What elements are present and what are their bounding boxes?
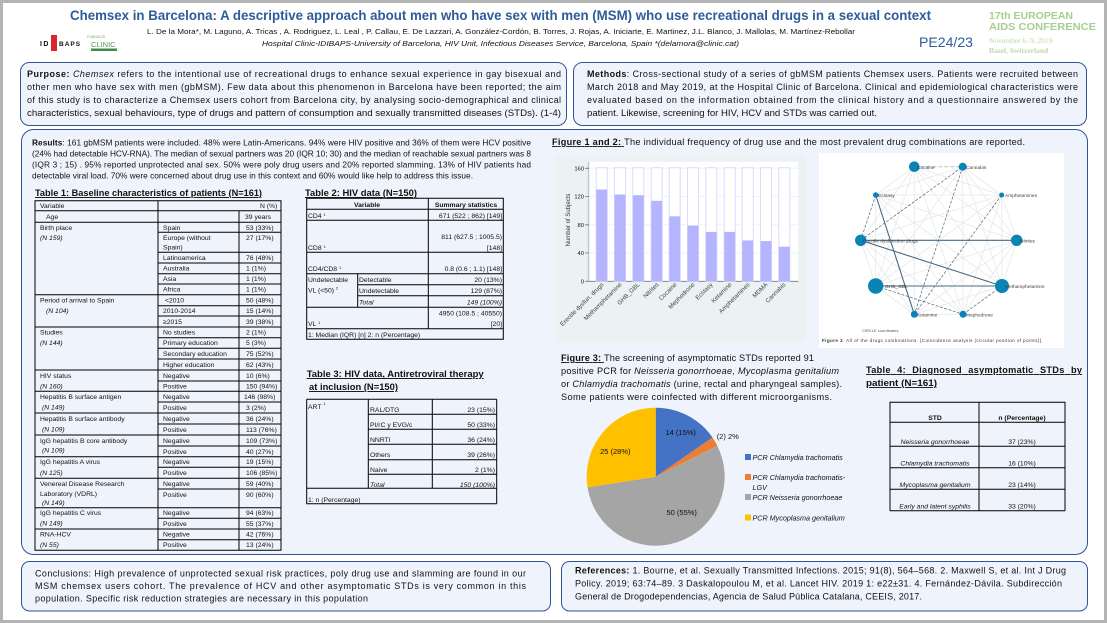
table 1: 15 (14%) — [246, 308, 274, 315]
table 1: 1 (1%) — [246, 286, 266, 294]
table 1: (N 159) — [40, 235, 63, 242]
table 1: Negative — [163, 394, 190, 401]
table 1: Negative — [163, 438, 190, 445]
bar chart: drug use frequency: 40 — [578, 251, 584, 257]
table 2: CD4/CD8 — [308, 266, 337, 273]
table 1: Latinoamerica — [163, 255, 206, 262]
pie chart: STD screening: 50 (55%) — [666, 508, 697, 517]
table 2: Total — [359, 300, 374, 306]
table 1: (N 55) — [40, 542, 59, 549]
bar chart: drug use frequency: 80 — [578, 223, 584, 229]
table 1: 55 (37%) — [246, 521, 274, 528]
table 2: 20 (13%) — [474, 277, 502, 284]
table 1: (N 109) — [42, 448, 65, 454]
network chart: drug combinations: Amphetamines — [1005, 193, 1038, 199]
panel: references: General de Drogodependencias, Agencia de Salud Pública Catalana, CEEIS, 2017. — [575, 592, 922, 602]
heading: table 3: at inclusion (N=150) — [309, 382, 398, 393]
heading: table 4: patient (N=161) — [866, 378, 937, 388]
table 1: Variable — [40, 203, 65, 210]
table 1: (N 149) — [42, 500, 65, 507]
table 1: <2010 — [165, 298, 184, 304]
table 2: VL — [308, 321, 316, 328]
panel: results — [22, 130, 1088, 554]
pie legend: LGV — [752, 483, 768, 492]
heading: figure 3: or Chlamydia trachomatis (urine, rectal and pharyngeal samples). — [561, 379, 842, 389]
table 2: 149 (100%) — [467, 300, 502, 306]
network chart: drug combinations: Ecstasy — [878, 193, 895, 199]
logo: Hospital Clinic: CLINIC — [91, 40, 116, 49]
panel: conclusions: MSM chemsex users cohort. The prevalence of HCV and other asymptomatic STDs is very common in this — [35, 581, 526, 591]
table 2: 0.8 (0.6 ; 1.1) [148] — [445, 266, 502, 273]
network chart: drug combinations: GHB_GBL — [885, 284, 908, 290]
table 1: Secondary education — [163, 351, 227, 358]
results text — [32, 138, 531, 180]
table 1: 53 (33%) — [246, 225, 274, 232]
table 1: 62 (43%) — [246, 362, 274, 369]
table 1: Primary education — [163, 340, 218, 347]
table 4: 33 (20%) — [1008, 504, 1036, 510]
authors: L. De la Mora*, M. Laguno, A. Tricas , A. Rodriguez, L. Leal , P. Callau, E. De Lazzari, A. González-Cordón, B. Torres, J. Rojas, A. Iniciarte, E. Martinez, J.L. Blanco, J. Mallolas, M. Martínez-Rebollar — [147, 27, 856, 36]
bar chart: drug use frequency: Ketamine — [710, 281, 734, 305]
table 1: Europe (without — [163, 235, 211, 242]
affiliation: Hospital Clinic-IDIBAPS-University of Barcelona, HIV Unit, Infectious Diseases Service, Barcelona, Spain *(delamora@clinic.cat) — [262, 39, 740, 48]
table 2: Undetectable — [359, 288, 399, 295]
panel: methods: evaluated based on the information obtained from the clinical history and a questionnaire answered by the — [587, 95, 1078, 105]
pie chart: STD screening — [587, 408, 739, 546]
panel: methods: patient. Likewise, screening for HIV, HCV and STDs was carried out. — [587, 108, 877, 118]
table 1: Negative — [163, 459, 190, 466]
table 1: RNA-HCV — [40, 532, 71, 538]
table 1: Birth place — [40, 225, 72, 232]
table 1: 150 (94%) — [246, 384, 277, 390]
table 3: 23 (15%) — [467, 407, 495, 414]
table 1: (N 125) — [40, 470, 63, 477]
panel: references: Policy. 2019; 63:74–89. 3 Daskalopoulou M, et al. Lancet HIV. 2019 1: e22±31. 4. Fernández-Dávila. Subdirección — [575, 578, 1062, 588]
heading: figure 3: Figure 3: The screening of asymptomatic STDs reported 91 — [561, 353, 814, 363]
table 1: 42 (76%) — [246, 532, 274, 538]
table 1: Positive — [163, 542, 187, 549]
table 1: 113 (76%) — [246, 427, 277, 434]
heading: figure 3: Some patients were coinfected with different microorganisms. — [561, 392, 832, 402]
network chart: drug combinations: Erectile dysfunction drugs — [863, 238, 919, 244]
table 1: 146 (98%) — [244, 394, 275, 401]
panel: methods — [574, 62, 1086, 126]
panel: purpose: other men who have sex with men (gbMSM). Few data about this phenomenon in Barcelona have been reported; the aim — [27, 82, 561, 92]
panel: conclusions: population. Specific risk reduction strategies are necessary in this population — [35, 594, 368, 604]
table 2: Undetectable — [308, 277, 348, 284]
table 1: 2 (1%) — [246, 330, 266, 336]
heading: table 4 — [866, 365, 1083, 388]
heading: table 3 — [307, 369, 484, 393]
table 2: Detectable — [359, 277, 392, 284]
table 1: ≥2015 — [163, 319, 182, 326]
panel: conclusions: Conclusions: High prevalence of unprotected sexual risk practices, poly drug use and slamming are found in our — [35, 568, 526, 578]
table 1: 40 (27%) — [246, 449, 274, 456]
table 3: Naive — [370, 467, 388, 474]
table 1: 75 (52%) — [246, 351, 274, 358]
table 2: CD4 — [308, 213, 322, 220]
table 1: No studies — [163, 330, 196, 336]
bar chart: drug use frequency — [556, 155, 806, 342]
table 1: 2010-2014 — [163, 308, 196, 315]
conference logo: Basel, Switzerland — [989, 46, 1049, 55]
table 1: (N 149) — [40, 520, 63, 528]
heading: figure 3: positive PCR for Neisseria gonorrhoeae, Mycoplasma genitalium — [561, 366, 839, 376]
panel: purpose: of this study is to characterize a Chemsex users cohort from Barcelona city, by analysing socio-demographical and clinical — [27, 95, 561, 105]
table 1: 50 (48%) — [246, 298, 274, 304]
table 1: 1 (1%) — [246, 266, 266, 272]
bar chart: drug use frequency: 160 — [574, 166, 584, 172]
poster code: PE24/23 — [919, 35, 973, 50]
table 3: Others — [370, 452, 391, 459]
table 1: Hepatitis B surface antigen — [40, 394, 121, 401]
network chart: drug combinations: Figure 2. All of the drugs combinations. [Coincidence analysis (circular position of points)] — [822, 338, 1041, 343]
panel: references — [562, 562, 1088, 611]
results text: (IQR 3 ; 15) . 95% reported unprotected anal sex. 50% were poly drug users and 20% reported slamming. 13% of HIV patients had — [32, 160, 531, 170]
table 1: 59 (40%) — [246, 481, 274, 488]
table 1: Hepatitis B surface antibody — [40, 416, 125, 423]
network chart: drug combinations: CIRCLE coordinates — [862, 328, 898, 333]
table 1: 10 (6%) — [246, 373, 270, 380]
network chart: drug combinations: Mephedrone — [966, 312, 993, 318]
panel: references: References: 1. Bourne, et al. Sexually Transmitted Infections. 2015; 91(8), 564–568. 2. Maxwell S, et al. Int J Drug — [575, 566, 1066, 576]
table 1: Venereal Disease Research — [40, 481, 124, 488]
bar chart: drug use frequency: Cocaine — [658, 281, 679, 302]
pie legend: PCR Mycoplasma genitalium — [752, 514, 845, 522]
table 1: Laboratory (VDRL) — [40, 491, 97, 498]
table 1: (N 104) — [46, 308, 69, 315]
pie chart: STD screening: (2) 2% — [717, 432, 739, 441]
heading: table 4: Table 4: Diagnosed asymptomatic STDs by — [866, 365, 1083, 375]
table 2: VL (<50) — [308, 288, 334, 294]
network chart: drug combinations: Cocaine — [917, 165, 935, 171]
heading: table 1: Table 1: Baseline characteristics of patients (N=161) — [35, 188, 262, 199]
pie legend — [745, 453, 846, 522]
table 3: 150 (100%) — [460, 482, 495, 489]
table 2: 671 (522 ; 862) [149] — [439, 213, 502, 220]
table 2: 811 (627.5 ; 1005.5) — [441, 234, 502, 241]
network chart: drug combinations: Ketamine — [917, 312, 938, 318]
table 1: 94 (63%) — [246, 510, 274, 517]
logo: Hospital Clinic: FUNDACIÓ — [87, 34, 106, 39]
table 1: Australia — [163, 266, 190, 272]
heading: table 2: Table 2: HIV data (N=150) — [305, 188, 417, 199]
table 1: Positive — [163, 427, 187, 434]
table 1: Spain — [163, 225, 181, 232]
table 1: 90 (60%) — [246, 492, 274, 499]
table 3: 1: n (Percentage) — [308, 497, 361, 504]
table 4: Early and latent syphilis — [899, 504, 971, 510]
bar chart: drug use frequency: Methamphetamine — [583, 281, 624, 322]
logo: IDIBAPS: ID — [40, 41, 50, 48]
table 1: Positive — [163, 492, 187, 499]
table 1: (N 149) — [42, 404, 65, 412]
table 1: Negative — [163, 373, 190, 380]
table 3: PI/rC y EVG/c — [370, 422, 413, 429]
table 4: Neisseria gonorrhoeae — [901, 439, 970, 446]
title: Chemsex in Barcelona: A descriptive approach about men who have sex with men (MSM) who use recreational drugs in a sexual context — [70, 7, 931, 23]
table 1: Asia — [163, 276, 176, 283]
table 1: 76 (48%) — [246, 255, 274, 262]
table 1: Africa — [163, 286, 181, 294]
table 3: 36 (24%) — [467, 437, 495, 444]
bar chart: drug use frequency: Nitrites — [642, 281, 660, 300]
table 1: 13 (24%) — [246, 542, 274, 549]
table 1: Negative — [163, 532, 190, 538]
logo: Hospital Clinic — [87, 34, 117, 51]
table 3: NNRTI — [370, 437, 391, 444]
table 1: 1 (1%) — [246, 276, 266, 283]
pie chart: STD screening: 14 (15%) — [665, 428, 696, 437]
results text: detectable viral load. 70% were concerned about drug use in this context and 60% would like help to address this issue. — [32, 170, 473, 180]
table 1: 3 (2%) — [246, 405, 266, 412]
bar chart: drug use frequency: Erectile dysfun. drugs — [559, 281, 605, 328]
logo: IDIBAPS: BAPS — [59, 41, 81, 48]
table 1: 39 years — [245, 214, 272, 221]
panel: purpose: Purpose: Chemsex refers to the intentional use of recreational drugs to enhance sexual experience in gay bisexual and — [27, 69, 561, 79]
table 1: N (%) — [260, 203, 277, 210]
table 1: 36 (24%) — [246, 416, 274, 423]
bar chart: drug use frequency: Cannabis — [764, 281, 787, 305]
table 2: 1: Median (IQR) [n] 2: n (Percentage) — [308, 332, 420, 339]
table 2: 1 — [324, 244, 326, 249]
table 1: Positive — [163, 449, 187, 456]
logo: IDIBAPS — [40, 35, 81, 51]
table 1: Negative — [163, 481, 190, 488]
table 2: 1 — [324, 212, 326, 217]
conference logo: 17th EUROPEAN — [989, 10, 1073, 22]
table 4: STD — [928, 415, 942, 422]
table 1: Positive — [163, 405, 187, 412]
pie chart: STD screening: 25 (28%) — [600, 447, 631, 456]
table 3: Total — [370, 482, 385, 489]
table 2: 1 — [318, 320, 321, 325]
pie legend: PCR Chlamydia trachomatis- — [752, 473, 846, 482]
heading: figures 1 and 2: Figure 1 and 2: The individual frequency of drug use and the most prevalent drug combinations are reported. — [552, 137, 1025, 147]
table 1: (N 109) — [42, 426, 65, 434]
panel: methods: March 2018 and May 2019, at the Hospital Clinic of Barcelona. Clinical and epidemiological characteristics were — [587, 82, 1078, 92]
table 1: Age — [46, 214, 58, 221]
bar chart: drug use frequency: 0 — [581, 280, 584, 286]
pie legend: PCR Neisseria gonorrhoeae — [752, 493, 842, 502]
table 1: Negative — [163, 416, 190, 423]
table 2: [148] — [487, 245, 502, 252]
pie legend: PCR Chlamydia trachomatis — [752, 453, 843, 462]
network chart: drug combinations: Nitrites — [1020, 238, 1036, 244]
network chart: drug combinations: Cannabis — [966, 165, 987, 171]
bar chart: drug use frequency: Number of Subjects — [566, 194, 572, 246]
table 1: IgG hepatitis B core antibody — [40, 438, 128, 445]
network chart: drug combinations — [819, 153, 1064, 348]
table 1 — [35, 201, 281, 550]
table 4: Chlamydia trachomatis — [900, 460, 970, 468]
table 2: [20] — [491, 321, 502, 328]
table 4: 23 (14%) — [1008, 482, 1036, 489]
network chart: drug combinations: Methamphetamine — [1005, 284, 1045, 290]
conference logo: November 6–9, 2019 — [989, 36, 1053, 45]
table 1: IgG hepatitis C virus — [40, 510, 102, 517]
table 1: Spain) — [163, 244, 183, 252]
panel: conclusions — [22, 562, 550, 611]
table 1: (N 144) — [40, 340, 63, 347]
table 1: 19 (15%) — [246, 459, 274, 466]
table 4: 37 (23%) — [1008, 439, 1036, 446]
panel: purpose: characteristics, sexual behaviours, type of drugs and pattern of consumption and sexually transmitted diseases (STDs). (1-4) — [27, 108, 561, 118]
table 1: Period of arrival to Spain — [40, 298, 115, 304]
table 1: Studies — [40, 330, 63, 336]
table 1: Positive — [163, 521, 187, 528]
table 3: ART — [308, 404, 321, 411]
table 3: RAL/DTG — [370, 407, 399, 414]
panel: purpose — [20, 62, 566, 126]
table 1: Positive — [163, 384, 187, 390]
table 1: Higher education — [163, 362, 215, 369]
table 2: CD8 — [308, 245, 322, 252]
table 1: 109 (73%) — [246, 438, 277, 445]
table 1: Negative — [163, 510, 190, 517]
table 3: 2 (1%) — [475, 467, 495, 474]
results text: (24% had detectable HCV-RNA). The median of sexual partners was 20 (IQR 10; 30) and the median of reachable sexual partners was 8 — [32, 148, 531, 158]
table 2: Summary statistics — [435, 202, 497, 209]
bar chart: drug use frequency: Mephedrone — [667, 281, 697, 311]
table 2 — [307, 198, 503, 339]
table 2: 1 — [339, 265, 342, 270]
heading: table 3: Table 3: HIV data, Antiretroviral therapy — [307, 369, 484, 380]
bar chart: drug use frequency: MDMA — [751, 281, 770, 300]
table 3: 50 (33%) — [467, 422, 495, 429]
table 3: 39 (26%) — [467, 452, 495, 459]
bar chart: drug use frequency: GHB_GBL — [616, 281, 642, 307]
table 1: IgG hepatitis A virus — [40, 459, 101, 466]
table 4 — [890, 402, 1065, 511]
table 2: Variable — [354, 202, 380, 209]
results text: Results: 161 gbMSM patients were included. 48% were Latin-Americans. 94% were HIV positive and 36% of them were HCV positive — [32, 138, 531, 148]
table 4: Mycoplasma genitalium — [899, 482, 971, 489]
bar chart: drug use frequency: 120 — [574, 195, 584, 201]
bar chart: drug use frequency: Amphetamines — [718, 281, 751, 315]
table 2: 4950 (108.5 ; 40550) — [439, 310, 502, 318]
table 1: Positive — [163, 470, 187, 477]
conference logo — [989, 10, 1096, 55]
table 2: 129 (87%) — [471, 288, 502, 295]
table 1: 27 (17%) — [246, 235, 274, 242]
panel: methods: Methods: Cross-sectional study of a series of gbMSM patients Chemsex users. Patients were recruited between — [587, 69, 1078, 79]
bar chart: drug use frequency: Ecstasy — [694, 281, 715, 302]
table 3 — [307, 399, 497, 504]
conference logo: AIDS CONFERENCE — [989, 21, 1096, 33]
table 1: 106 (85%) — [246, 470, 277, 477]
table 2: 2 — [336, 286, 339, 290]
heading: figure 3 — [561, 353, 842, 402]
table 1: 5 (3%) — [246, 340, 266, 347]
table 1: HIV status — [40, 373, 72, 380]
table 3: 1 — [323, 401, 326, 406]
table 4: n (Percentage) — [998, 415, 1046, 422]
table 1: (N 160) — [40, 384, 63, 390]
table 1: 39 (38%) — [246, 319, 274, 326]
table 4: 16 (10%) — [1008, 460, 1036, 468]
